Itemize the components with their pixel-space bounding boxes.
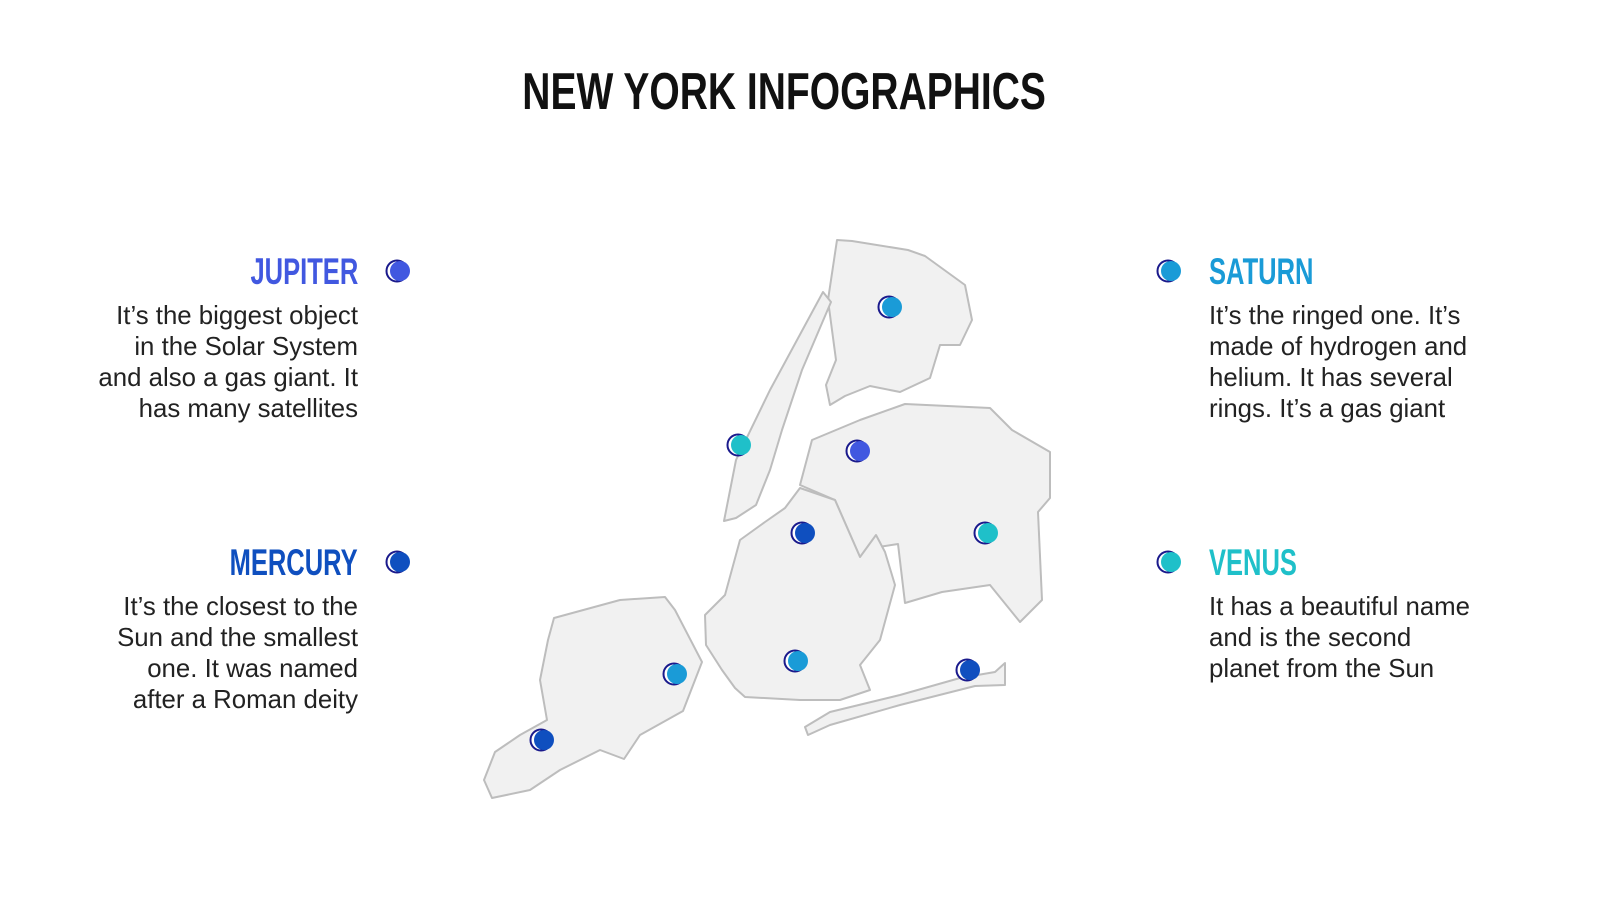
map: brooklyn [705,488,895,700]
icon: mercury dot [386,552,410,572]
text: venus: planet from the Sun [1209,655,1434,683]
icon: jupiter dot [386,260,410,282]
text: saturn: helium. It has several [1209,364,1453,392]
text: venus [1209,593,1470,683]
text: venus: and is the second [1209,624,1411,652]
text: jupiter: It’s the biggest object [116,302,358,330]
text: mercury [117,593,358,714]
text: mercury: It’s the closest to the [123,593,358,621]
text: saturn: rings. It’s a gas giant [1209,395,1445,423]
heading: venus: VENUS [1209,542,1297,583]
text: jupiter: has many satellites [139,395,358,423]
icon: saturn dot [1158,260,1181,282]
text: jupiter: in the Solar System [134,333,358,361]
markers [530,296,998,750]
map: rockaway [805,663,1005,735]
heading: saturn: SATURN [1209,251,1313,292]
heading: mercury: MERCURY [230,542,358,583]
icon: venus dot [1158,552,1181,572]
map: manhattan [724,292,831,521]
map: staten island [484,597,702,798]
text: saturn: It’s the ringed one. It’s [1209,302,1460,330]
text: saturn [1209,302,1467,423]
text: jupiter: and also a gas giant. It [98,364,358,392]
map: bronx [826,240,972,405]
heading: jupiter: JUPITER [250,251,358,292]
text: jupiter [98,302,358,423]
title: NEW YORK INFOGRAPHICS [522,63,1046,121]
text: venus: It has a beautiful name [1209,593,1470,621]
text: mercury: Sun and the smallest [117,624,358,652]
map: queens [800,404,1050,622]
text: mercury: one. It was named [147,655,358,683]
text: saturn: made of hydrogen and [1209,333,1467,361]
text: mercury: after a Roman deity [133,686,358,714]
